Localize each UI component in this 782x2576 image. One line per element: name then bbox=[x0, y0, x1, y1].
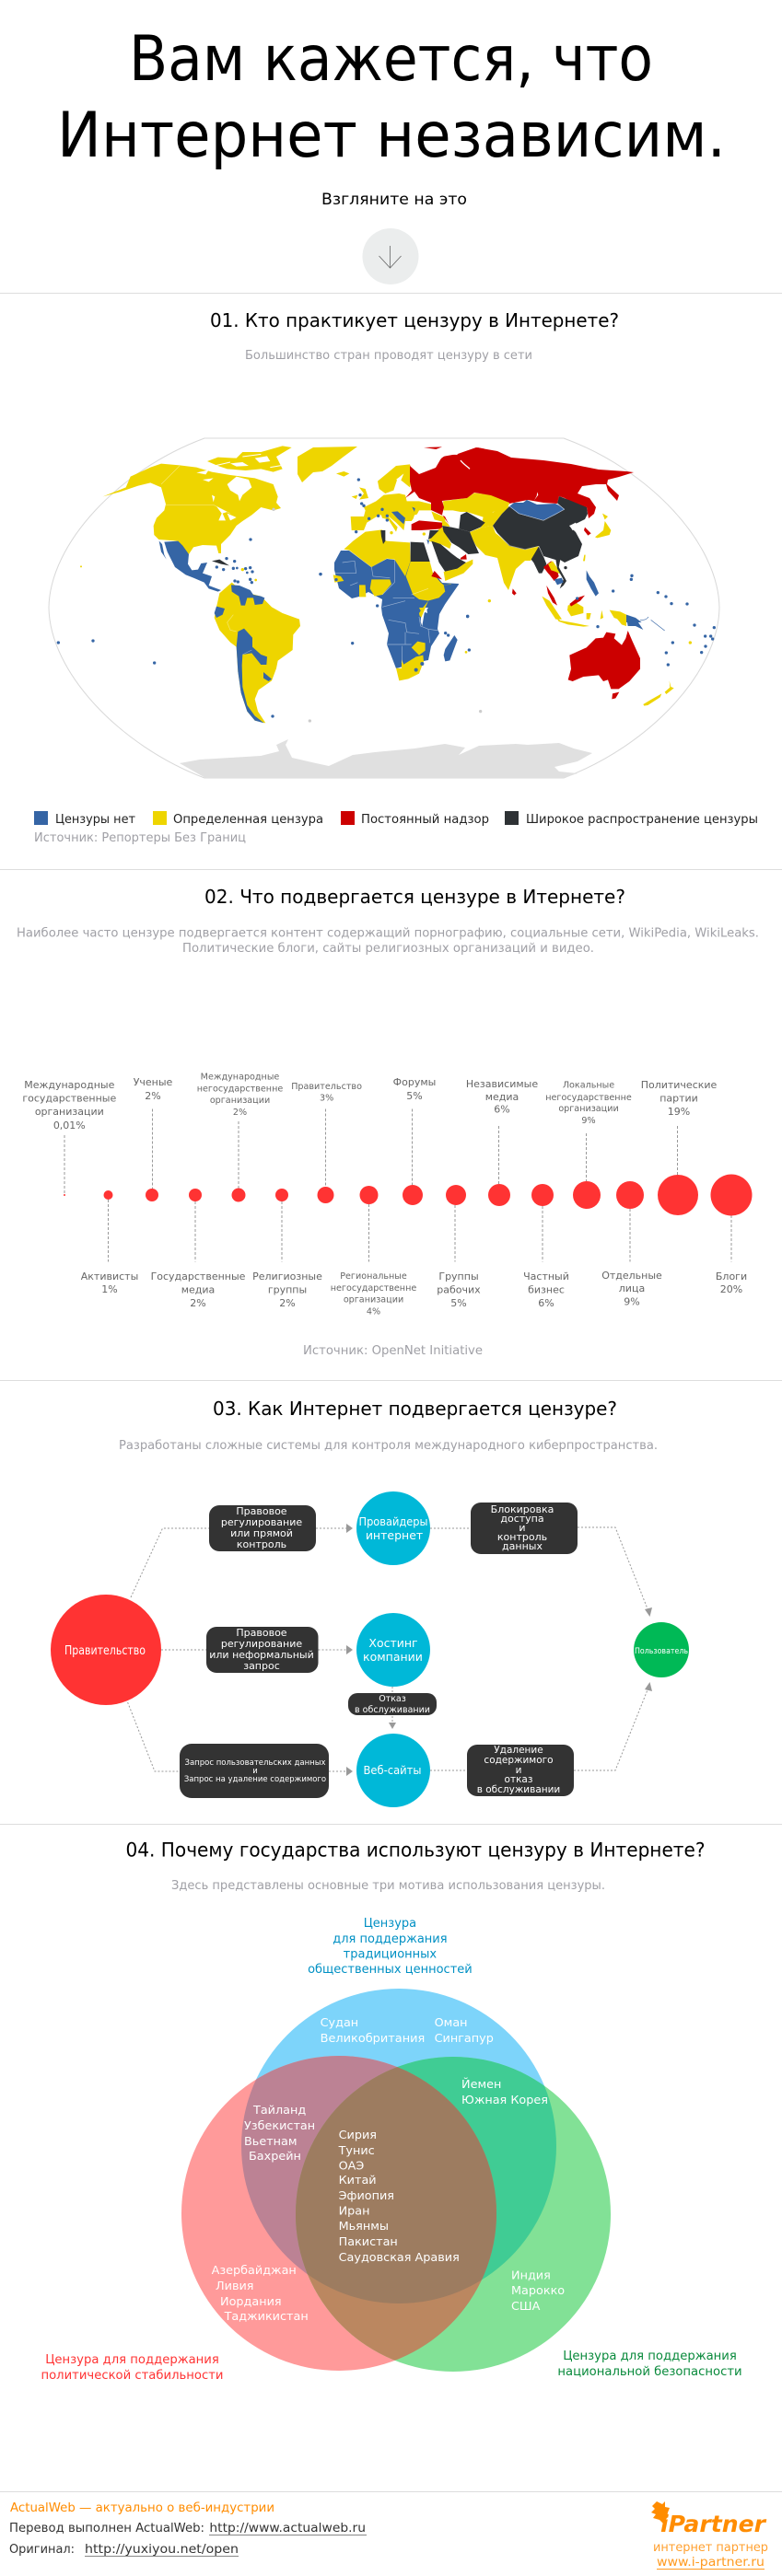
box: denial of service: Отказ bbox=[379, 1694, 406, 1704]
bubble labels above: Политические bbox=[641, 1079, 718, 1091]
box: legal regulation or informal request: Правовое bbox=[236, 1627, 287, 1639]
box: content removal and denial of service: в обслуживании bbox=[477, 1784, 560, 1795]
venn label: traditional values: традиционных bbox=[344, 1948, 437, 1962]
venn: values and politics: Тайланд bbox=[252, 2104, 306, 2118]
box: content removal and denial of service bbox=[467, 1745, 574, 1796]
bubble labels above: Локальные bbox=[563, 1081, 614, 1090]
box: blocking access and data control bbox=[471, 1503, 578, 1554]
bubble labels below: организации bbox=[344, 1294, 403, 1305]
bubble labels above: 2% bbox=[233, 1108, 247, 1118]
venn: all three motives: ОАЭ bbox=[339, 2160, 364, 2174]
venn: values and politics: Узбекистан bbox=[244, 2119, 315, 2133]
bubble labels above: 3% bbox=[320, 1094, 333, 1103]
venn: values and politics: Бахрейн bbox=[249, 2150, 301, 2164]
venn: politics only: Иордания bbox=[220, 2295, 282, 2309]
bubble labels below: 2% bbox=[279, 1297, 296, 1309]
partner logo: интернет партнер bbox=[653, 2540, 768, 2555]
footer credits bbox=[9, 2501, 367, 2557]
bubble labels above: 2% bbox=[145, 1090, 161, 1102]
venn label: traditional values: Цензура bbox=[364, 1917, 416, 1931]
bubble labels above: организации bbox=[35, 1106, 104, 1118]
node: internet providers bbox=[356, 1491, 430, 1565]
box: user data and content removal request: и bbox=[252, 1767, 258, 1776]
bubble labels above: негосударственне bbox=[545, 1093, 632, 1103]
map legend bbox=[34, 811, 758, 827]
bubble labels below: Частный bbox=[523, 1271, 569, 1282]
bubble labels below: 4% bbox=[367, 1307, 380, 1317]
section 02 heading: 02. Что подвергается цензуре в Итернете? bbox=[204, 886, 625, 908]
map legend: Цензуры нет bbox=[55, 813, 135, 827]
node: hosting companies: Хостинг bbox=[368, 1636, 418, 1650]
subtitle: Взгляните на это bbox=[321, 191, 467, 209]
box: denial of service: в обслуживании bbox=[355, 1705, 430, 1715]
bubble labels above: партии bbox=[659, 1092, 698, 1105]
venn: traditional values only: Сингапур bbox=[435, 2032, 494, 2046]
bubble labels below: Активисты bbox=[81, 1271, 138, 1282]
box: denial of service bbox=[348, 1693, 437, 1715]
box: content removal and denial of service: и bbox=[516, 1765, 521, 1776]
venn: all three motives: Китай bbox=[339, 2174, 377, 2187]
node: internet providers: Провайдеры bbox=[359, 1514, 427, 1528]
box: user data and content removal request: Запрос на удаление содержимого bbox=[184, 1775, 326, 1784]
venn: all three motives: Тунис bbox=[338, 2144, 375, 2158]
bubble labels above: государственные bbox=[22, 1092, 116, 1105]
section 03 subtitle: Разработаны сложные системы для контроля международного киберпространства. bbox=[119, 1439, 658, 1453]
bubble labels above: Ученые bbox=[134, 1076, 173, 1088]
venn label: traditional values: для поддержания bbox=[333, 1932, 448, 1946]
box: legal regulation or direct control bbox=[209, 1505, 316, 1551]
box: legal regulation or informal request: запрос bbox=[243, 1660, 280, 1672]
venn: politics only: Таджикистан bbox=[224, 2310, 309, 2324]
bubble labels above: негосударственне bbox=[197, 1085, 283, 1094]
footer credits: http://www.actualweb.ru bbox=[209, 2522, 366, 2535]
venn label: national security: Цензура для поддержания bbox=[563, 2350, 737, 2363]
chart source: Источник: OpenNet Initiative bbox=[303, 1344, 483, 1358]
box: legal regulation or informal request: регулирование bbox=[221, 1638, 302, 1650]
box: user data and content removal request bbox=[180, 1744, 329, 1798]
section 03 heading: 03. Как Интернет подвергается цензуре? bbox=[213, 1398, 617, 1420]
world map bbox=[49, 438, 719, 778]
venn: politics only: Азербайджан bbox=[212, 2264, 297, 2278]
bubble labels below: бизнес bbox=[528, 1283, 565, 1296]
bubble chart bbox=[22, 1072, 753, 1317]
node: government bbox=[51, 1595, 161, 1705]
bubble labels below: 20% bbox=[720, 1283, 742, 1295]
venn: values and security: Южная Корея bbox=[461, 2094, 548, 2107]
box: legal regulation or direct control: контроль bbox=[237, 1538, 286, 1550]
section 02 subtitle: Наиболее часто цензуре подвергается контент содержащий порнографию, социальные сети, WikiPedia, WikiLeaks. bbox=[17, 926, 759, 941]
icon: leaf bbox=[651, 2501, 670, 2524]
venn: security only: Марокко bbox=[511, 2284, 565, 2298]
node: hosting companies bbox=[356, 1613, 430, 1687]
bubble labels below: 5% bbox=[450, 1297, 467, 1309]
section 04 heading: 04. Почему государства используют цензуру в Интернете? bbox=[125, 1839, 706, 1862]
venn: security only: Индия bbox=[511, 2269, 551, 2283]
bubble labels above: Форумы bbox=[393, 1076, 436, 1088]
bubble labels below: Группы bbox=[438, 1271, 479, 1282]
venn label: national security: национальной безопасности bbox=[557, 2364, 742, 2379]
box: blocking access and data control: контроль bbox=[497, 1531, 547, 1543]
venn label: traditional values: общественных ценностей bbox=[308, 1963, 473, 1977]
map legend: Постоянный надзор bbox=[361, 813, 489, 827]
title bbox=[57, 23, 726, 172]
node: user bbox=[634, 1622, 689, 1677]
venn: security only: США bbox=[511, 2300, 541, 2314]
partner logo: www.i-partner.ru bbox=[657, 2555, 764, 2570]
node: websites: Веб-сайты bbox=[363, 1763, 422, 1777]
bubble labels below: 6% bbox=[538, 1297, 554, 1309]
bubble labels below: лица bbox=[619, 1282, 645, 1294]
connectors bbox=[128, 1524, 652, 1776]
partner logo: iPartner bbox=[660, 2511, 767, 2537]
box: content removal and denial of service: Удаление bbox=[494, 1745, 543, 1756]
box: blocking access and data control: данных bbox=[502, 1540, 543, 1552]
footer credits: http://yuxiyou.net/open bbox=[85, 2543, 239, 2557]
bubble labels below: медиа bbox=[181, 1283, 215, 1296]
icon: down arrow in circle bbox=[363, 228, 418, 284]
box: legal regulation or direct control: регулирование bbox=[221, 1516, 302, 1528]
map legend: Определенная цензура bbox=[173, 813, 323, 827]
box: blocking access and data control: доступа bbox=[500, 1513, 544, 1525]
bubble labels below: 1% bbox=[101, 1283, 118, 1295]
bubble labels above: 0,01% bbox=[53, 1120, 86, 1131]
bubble labels above: организации bbox=[558, 1104, 619, 1114]
map source: Источник: Репортеры Без Границ bbox=[34, 831, 246, 845]
bubble labels below: негосударственне bbox=[331, 1283, 416, 1294]
bubble labels above: Правительство bbox=[291, 1082, 362, 1092]
section 02 subtitle bbox=[17, 926, 759, 956]
venn: all three motives: Саудовская Аравия bbox=[339, 2251, 460, 2265]
bubble labels below: группы bbox=[268, 1283, 307, 1296]
bubble labels above: Независимые bbox=[466, 1078, 538, 1090]
bubble labels below: Отдельные bbox=[601, 1270, 662, 1282]
partner logo bbox=[651, 2501, 768, 2570]
box: legal regulation or informal request bbox=[206, 1627, 319, 1673]
bubble labels below bbox=[81, 1270, 747, 1317]
section 02 subtitle: Политические блоги, сайты религиозных организаций и видео. bbox=[182, 942, 594, 956]
node: government: Правительство bbox=[64, 1644, 146, 1658]
bubble labels below: Государственные bbox=[151, 1271, 246, 1282]
bubble labels above: 5% bbox=[406, 1090, 423, 1102]
venn: all three motives: Сирия bbox=[339, 2129, 377, 2142]
node: websites bbox=[356, 1734, 430, 1807]
section 01 subtitle: Большинство стран проводят цензуру в сети bbox=[245, 349, 532, 363]
bubble labels below: Региональные bbox=[340, 1271, 407, 1282]
venn label: political stability: Цензура для поддержания bbox=[45, 2353, 219, 2367]
venn diagram bbox=[181, 1989, 611, 2372]
box: legal regulation or direct control: Правовое bbox=[236, 1505, 287, 1517]
venn: traditional values only: Великобритания bbox=[321, 2032, 425, 2046]
box: blocking access and data control: и bbox=[519, 1522, 526, 1534]
bubble labels below: 2% bbox=[190, 1297, 206, 1309]
venn: traditional values only: Оман bbox=[435, 2016, 468, 2030]
box: content removal and denial of service: отказ bbox=[505, 1774, 532, 1785]
bubble labels above: медиа bbox=[485, 1091, 519, 1103]
venn: all three motives: Иран bbox=[339, 2205, 370, 2219]
bubble labels below: рабочих bbox=[437, 1283, 481, 1296]
title: Вам кажется, что bbox=[129, 23, 653, 96]
section 01 heading: 01. Кто практикует цензуру в Интернете? bbox=[210, 309, 619, 331]
box: content removal and denial of service: содержимого bbox=[484, 1755, 554, 1766]
venn: all three motives: Мьянмы bbox=[339, 2220, 389, 2234]
box: legal regulation or direct control: или прямой bbox=[230, 1527, 293, 1539]
box: blocking access and data control: Блокировка bbox=[491, 1503, 554, 1515]
section 04 subtitle: Здесь представлены основные три мотива использования цензуры. bbox=[171, 1879, 605, 1893]
footer credits: Оригинал: bbox=[9, 2543, 75, 2557]
venn: politics only: Ливия bbox=[216, 2280, 254, 2293]
bubble labels below: Блоги bbox=[716, 1271, 747, 1282]
venn: all three motives: Эфиопия bbox=[339, 2189, 394, 2203]
flow diagram bbox=[51, 1491, 689, 1807]
bubble labels above: Международные bbox=[201, 1072, 279, 1083]
bubble labels above: организации bbox=[210, 1096, 270, 1106]
bubble labels above: 9% bbox=[581, 1116, 596, 1126]
node: internet providers: интернет bbox=[366, 1528, 423, 1542]
bubble labels above bbox=[22, 1072, 718, 1131]
box: legal regulation or informal request: или неформальный bbox=[209, 1649, 314, 1661]
venn: values and security: Йемен bbox=[461, 2077, 501, 2092]
bubble labels below: 9% bbox=[624, 1296, 640, 1308]
bubble labels below: Религиозные bbox=[252, 1271, 322, 1282]
node: hosting companies: компании bbox=[363, 1650, 423, 1664]
venn: traditional values only: Судан bbox=[321, 2016, 358, 2030]
bubble labels above: 6% bbox=[494, 1104, 510, 1116]
bubble labels above: 19% bbox=[668, 1106, 690, 1118]
map legend: Широкое распространение цензуры bbox=[526, 813, 758, 827]
footer credits: ActualWeb — актуально о веб-индустрии bbox=[10, 2501, 274, 2515]
venn: all three motives: Пакистан bbox=[339, 2235, 398, 2249]
box: user data and content removal request: Запрос пользовательских данных bbox=[185, 1758, 325, 1768]
venn label: political stability: политической стабильности bbox=[41, 2368, 224, 2383]
title: Интернет независим. bbox=[57, 99, 726, 172]
node: user: Пользователь bbox=[635, 1647, 688, 1656]
bubble labels above: Международные bbox=[24, 1079, 115, 1091]
footer credits: Перевод выполнен ActualWeb: bbox=[9, 2522, 204, 2535]
venn: values and politics: Вьетнам bbox=[244, 2135, 298, 2149]
